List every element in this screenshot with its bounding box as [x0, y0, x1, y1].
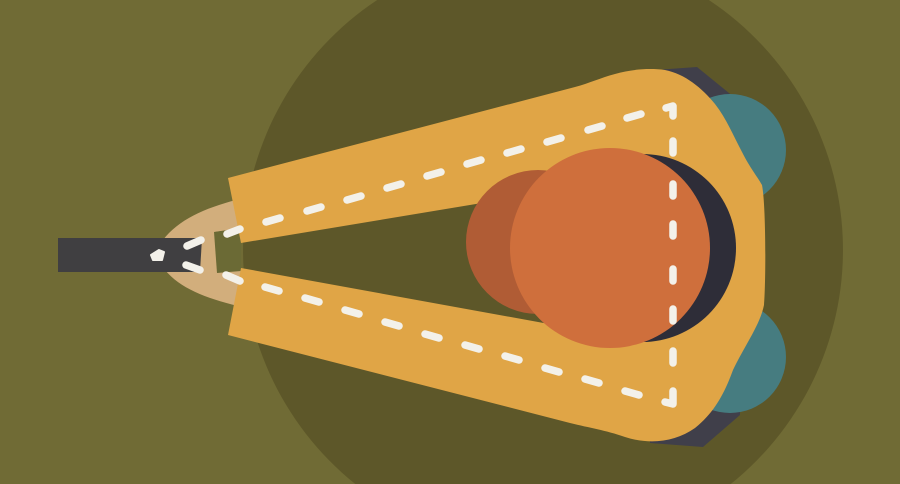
- teal circle bottom: [674, 301, 786, 413]
- dark back shape bottom: [650, 380, 740, 447]
- dark back shape top: [655, 67, 740, 140]
- white dashes: [186, 106, 673, 404]
- shadow circle: [243, 0, 843, 484]
- white tip: [151, 250, 164, 260]
- tan grip loop: [163, 200, 244, 306]
- yellow arms: [228, 69, 765, 441]
- inner gap: [214, 228, 241, 273]
- dark orange circle: [466, 170, 610, 314]
- dark crescent: [548, 154, 736, 342]
- dark bar: [58, 238, 202, 272]
- teal circle top: [674, 94, 786, 206]
- orange head: [510, 148, 710, 348]
